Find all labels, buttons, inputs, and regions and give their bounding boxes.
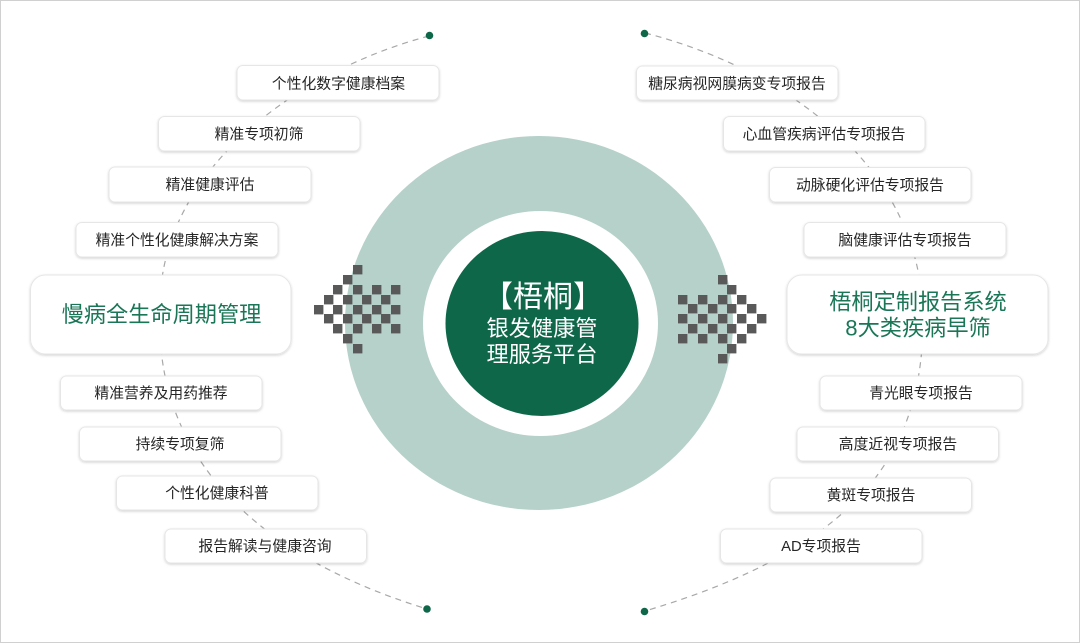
left heading box: 慢病全生命周期管理: 慢病全生命周期管理	[62, 302, 261, 327]
left item: 个性化数字健康档案: 个性化数字健康档案	[272, 74, 405, 92]
left checker arrow	[314, 265, 400, 353]
left item: 精准健康评估	[109, 167, 311, 202]
right item: 心血管疾病评估专项报告	[724, 116, 925, 151]
right item: 高度近视专项报告	[797, 427, 998, 461]
central circle	[345, 136, 733, 510]
left heading box: 慢病全生命周期管理	[30, 275, 291, 354]
outer ring	[345, 136, 733, 510]
left dashed arc	[160, 32, 433, 613]
right item: 糖尿病视网膜病变专项报告: 糖尿病视网膜病变专项报告	[648, 76, 826, 92]
platform title: 理服务平台	[487, 342, 597, 367]
right dashed arc	[641, 30, 923, 615]
left item: 精准专项初筛	[158, 116, 360, 151]
inner green disc	[446, 231, 638, 416]
right item: 脑健康评估专项报告	[804, 222, 1006, 257]
right item: 黄斑专项报告	[770, 478, 972, 512]
platform title	[483, 281, 603, 367]
right item: AD专项报告: AD专项报告	[781, 538, 861, 555]
right item: 心血管疾病评估专项报告: 心血管疾病评估专项报告	[743, 126, 905, 143]
right item: 黄斑专项报告: 黄斑专项报告	[827, 487, 915, 504]
left item: 持续专项复筛: 持续专项复筛	[136, 435, 224, 453]
left item: 精准个性化健康解决方案: 精准个性化健康解决方案	[96, 231, 259, 249]
platform title: 【梧桐】	[483, 281, 603, 314]
left item: 精准营养及用药推荐: 精准营养及用药推荐	[94, 385, 228, 402]
right item: 动脉硬化评估专项报告	[770, 168, 971, 202]
right item: 脑健康评估专项报告: 脑健康评估专项报告	[838, 232, 972, 249]
right item: 青光眼专项报告: 青光眼专项报告	[869, 385, 973, 402]
right item: AD专项报告	[720, 529, 922, 563]
right item: 高度近视专项报告: 高度近视专项报告	[839, 436, 957, 453]
left item: 个性化健康科普: 个性化健康科普	[165, 485, 269, 502]
right heading box: 梧桐定制报告系统 8大类疾病早筛: 梧桐定制报告系统	[829, 290, 1007, 314]
platform title: 银发健康管	[487, 316, 597, 341]
left item: 精准健康评估: 精准健康评估	[166, 176, 255, 194]
left item: 持续专项复筛	[80, 427, 281, 461]
right checker arrow	[678, 275, 766, 363]
white ring	[423, 211, 658, 436]
right item: 糖尿病视网膜病变专项报告	[636, 66, 838, 100]
right item: 动脉硬化评估专项报告: 动脉硬化评估专项报告	[796, 177, 944, 194]
right heading box: 梧桐定制报告系统 8大类疾病早筛	[787, 275, 1048, 354]
left item: 精准营养及用药推荐	[60, 376, 262, 410]
right item: 青光眼专项报告	[820, 376, 1022, 410]
left item: 个性化数字健康档案	[237, 66, 439, 100]
right heading box: 梧桐定制报告系统 8大类疾病早筛: 8大类疾病早筛	[845, 316, 991, 340]
left item: 个性化健康科普	[116, 476, 318, 510]
left item: 报告解读与健康咨询: 报告解读与健康咨询	[198, 538, 332, 555]
left item: 报告解读与健康咨询	[165, 529, 366, 563]
left item: 精准专项初筛: 精准专项初筛	[215, 126, 303, 143]
left item: 精准个性化健康解决方案	[76, 222, 278, 257]
